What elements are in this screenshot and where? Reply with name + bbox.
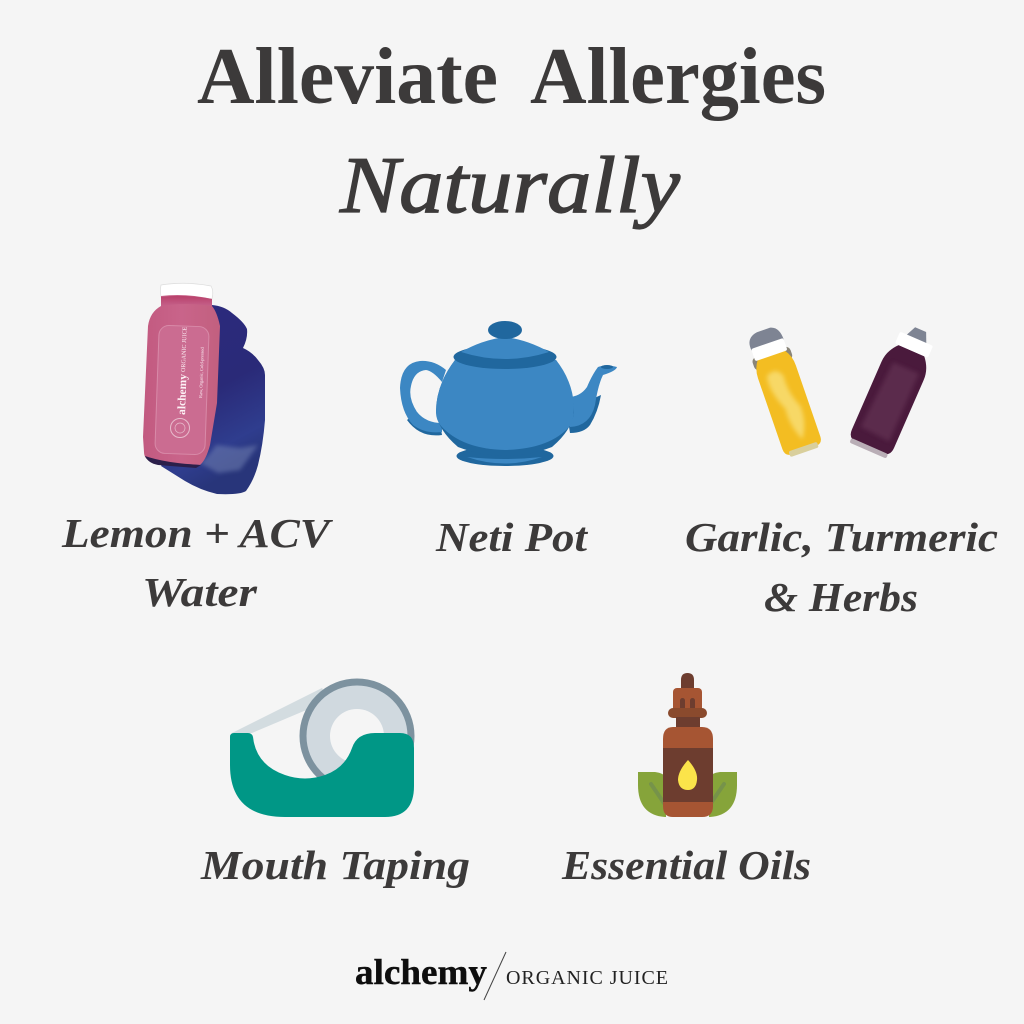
icon: yellow turmeric bottle [744, 324, 824, 459]
title: Allergies [530, 33, 826, 121]
label: garlic, turmeric and herbs: Garlic, Turmeric [685, 514, 998, 560]
logo: alchemy [355, 952, 487, 992]
label: garlic, turmeric and herbs [685, 514, 998, 620]
icon: yellow and purple juice bottles [744, 320, 942, 460]
label: lemon + ACV water [61, 510, 334, 615]
label: lemon + ACV water: Water [142, 569, 258, 615]
icon: lemon and ACV juice bottle: alchemy [176, 374, 189, 415]
label: essential oils: Essential Oils [561, 842, 811, 888]
icon: purple herb bottle [847, 320, 942, 460]
logo [355, 952, 668, 1000]
icon: essential oil dropper bottle [638, 673, 737, 817]
icon: tape dispenser [230, 682, 414, 817]
title [197, 33, 826, 230]
icon: lemon and ACV juice bottle: Raw, Organic, Cold-pressed [198, 347, 206, 398]
title: Naturally [339, 142, 681, 230]
label: lemon + ACV water: Lemon + ACV [61, 510, 334, 556]
icon: neti pot [400, 321, 617, 466]
label: neti pot: Neti Pot [435, 514, 589, 560]
label: garlic, turmeric and herbs: & Herbs [764, 574, 918, 620]
icon: lemon and ACV juice bottle [143, 283, 265, 494]
logo: ORGANIC JUICE [506, 967, 668, 989]
title: Alleviate [197, 33, 498, 121]
icon: lemon and ACV juice bottle: ORGANIC JUICE [181, 326, 189, 372]
label: mouth taping: Mouth Taping [200, 842, 470, 888]
